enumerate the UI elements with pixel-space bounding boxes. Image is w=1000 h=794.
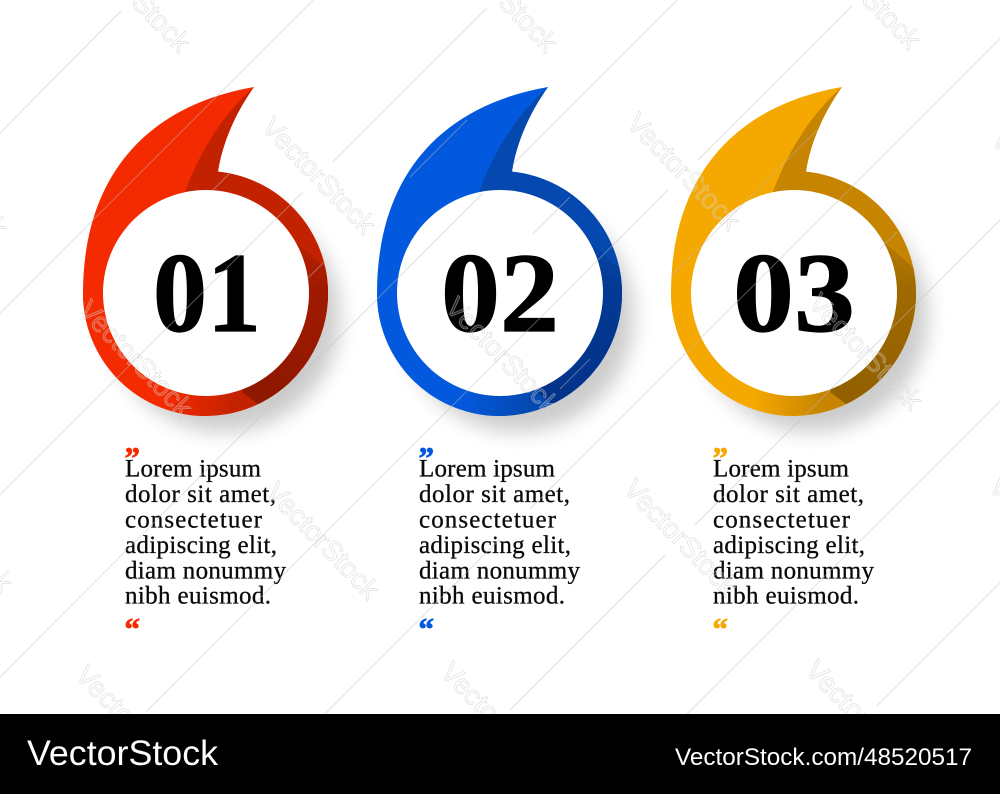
closing quote mark: ” (712, 440, 728, 475)
body text: consectetuer (125, 506, 263, 534)
body text (125, 456, 286, 610)
body text: adipiscing elit, (419, 532, 571, 559)
body text: adipiscing elit, (125, 532, 277, 559)
body text: Lorem ipsum (419, 456, 556, 482)
watermark text: VectorStock (618, 473, 744, 603)
closing quote mark: ” (124, 440, 140, 475)
number 03: 03 (733, 231, 855, 356)
watermark text: VectorStock (440, 291, 566, 421)
body text: Lorem ipsum (125, 456, 262, 482)
icon: blue quote badge (377, 87, 622, 416)
number 01: 01 (153, 231, 261, 356)
white inner circle (103, 190, 309, 396)
body text: nibh euismod. (419, 583, 565, 610)
body text: adipiscing elit, (713, 532, 865, 559)
watermark text: VectorStock (435, 656, 561, 786)
white inner circle (691, 190, 897, 396)
footer band (0, 714, 1000, 794)
badge shadow (696, 200, 928, 432)
footer logo text: VectorStock (27, 734, 219, 773)
closing quote mark: ” (418, 440, 434, 475)
panel: step 01 red (83, 87, 349, 628)
body text (419, 456, 580, 610)
number 02: 02 (441, 231, 559, 356)
opening quote mark: “ (418, 611, 434, 646)
footer image id: VectorStock.com/48520517 (675, 744, 972, 771)
body text: diam nonummy (713, 557, 874, 584)
watermark text: VectorStock (70, 659, 196, 789)
badge shadow (402, 200, 634, 432)
body text: diam nonummy (125, 557, 286, 584)
watermark text: VectorStock (800, 654, 926, 784)
icon: amber quote badge (671, 87, 916, 416)
watermark text: VectorStock (621, 107, 747, 237)
body text: diam nonummy (419, 557, 580, 584)
body text: dolor sit amet, (713, 481, 864, 508)
body text: nibh euismod. (713, 583, 859, 610)
body text: dolor sit amet, (419, 481, 570, 508)
panel: step 03 amber (671, 87, 937, 628)
body text: nibh euismod. (125, 583, 271, 610)
body text: Lorem ipsum (713, 456, 850, 482)
badge shadow (108, 200, 340, 432)
opening quote mark: “ (124, 611, 140, 646)
body text (713, 456, 874, 610)
watermark text: VectorStock (73, 294, 199, 424)
icon: red quote badge (83, 87, 328, 416)
watermark text: VectorStock (803, 287, 929, 417)
watermark text: VectorStock (260, 476, 386, 606)
white inner circle (397, 190, 603, 396)
body text: consectetuer (713, 506, 851, 534)
body text: dolor sit amet, (125, 481, 276, 508)
body text: consectetuer (419, 506, 557, 534)
panel: step 02 blue (377, 87, 643, 628)
opening quote mark: “ (712, 611, 728, 646)
watermark text: VectorStock (256, 111, 382, 241)
